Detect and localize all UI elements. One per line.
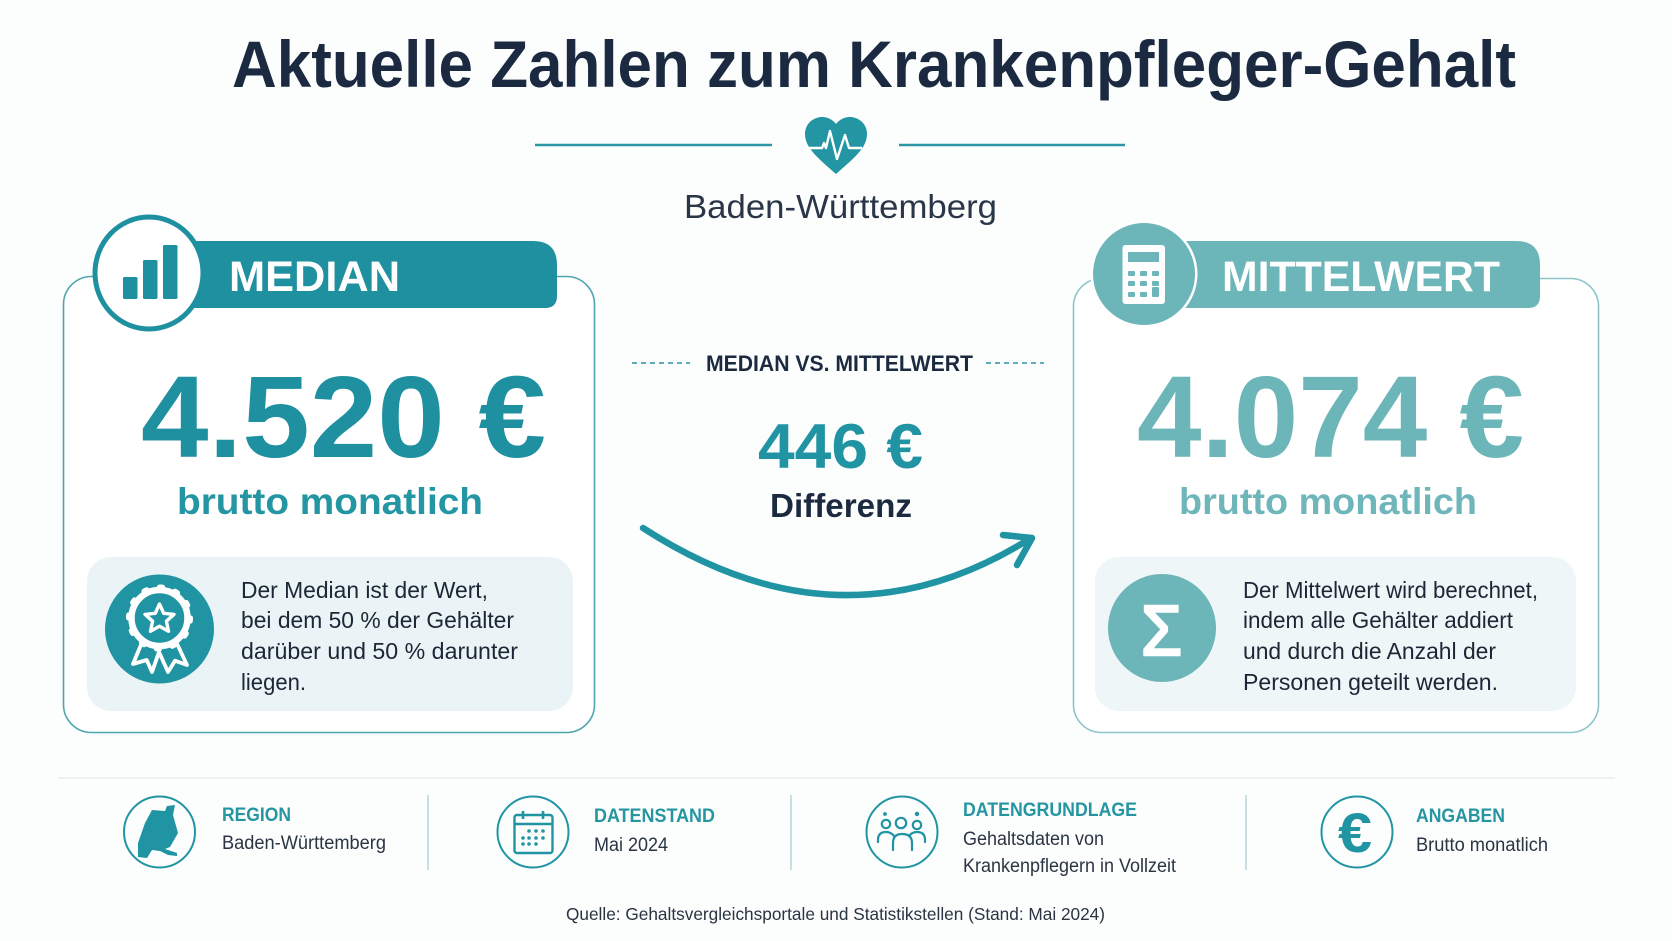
icon: euro: €: [1338, 801, 1372, 864]
difference label: Differenz: [770, 487, 912, 524]
footer item: datengrundlage: [866, 796, 1177, 877]
icon: bar chart: [95, 217, 203, 329]
icon: people: [866, 796, 938, 868]
panel: comparison: [632, 351, 1044, 595]
mittelwert explanation box: [1095, 557, 1576, 711]
icon: euro: [1322, 796, 1392, 868]
icon: sigma: Σ: [1141, 592, 1182, 671]
footer item: datenstand: [498, 796, 715, 868]
subtitle: Baden-Württemberg: [684, 188, 997, 225]
datenstand text: [594, 806, 715, 856]
mittelwert explanation text: Der Mittelwert wird berechnet,: [1243, 577, 1538, 603]
source note: Quelle: Gehaltsvergleichsportale und Statistikstellen (Stand: Mai 2024): [566, 904, 1105, 924]
angaben text: ANGABEN: [1416, 806, 1505, 827]
median explanation text: darüber und 50 % darunter: [241, 638, 518, 664]
datenstand text: Mai 2024: [594, 835, 668, 856]
datengrundlage text: DATENGRUNDLAGE: [963, 800, 1137, 821]
datenstand text: DATENSTAND: [594, 806, 715, 827]
icon: calendar: [498, 796, 568, 868]
mittelwert explanation text: Personen geteilt werden.: [1243, 669, 1498, 695]
angaben text: Brutto monatlich: [1416, 835, 1548, 856]
median banner: [170, 241, 557, 308]
icon: award rosette: [105, 574, 214, 684]
footer item: angaben: [1322, 796, 1548, 868]
median explanation text: [241, 577, 518, 695]
footer item: region: [124, 796, 386, 868]
median unit: brutto monatlich: [177, 481, 483, 522]
mittelwert heading: MITTELWERT: [1222, 253, 1500, 301]
title: Aktuelle Zahlen zum Krankenpfleger-Gehalt: [232, 27, 1516, 101]
panel: median: [64, 217, 594, 732]
median heading: MEDIAN: [229, 253, 400, 301]
region text: REGION: [222, 805, 291, 826]
panel: mittelwert: [1074, 220, 1598, 732]
mittelwert value: 4.074 €: [1137, 352, 1524, 482]
mittelwert banner: [1170, 241, 1540, 308]
icon: sigma: [1108, 574, 1216, 682]
arrow: [643, 528, 1032, 595]
mittelwert unit: brutto monatlich: [1179, 481, 1477, 522]
region text: [222, 805, 386, 854]
median explanation text: liegen.: [241, 669, 306, 695]
datengrundlage text: Gehaltsdaten von: [963, 829, 1104, 850]
median value: 4.520 €: [141, 352, 546, 482]
median explanation box: [87, 557, 573, 711]
median explanation text: bei dem 50 % der Gehälter: [241, 607, 514, 633]
mittelwert explanation text: [1243, 577, 1538, 695]
angaben text: [1416, 806, 1548, 856]
median explanation text: Der Median ist der Wert,: [241, 577, 488, 603]
datengrundlage text: Krankenpflegern in Vollzeit: [963, 856, 1177, 877]
difference value: 446 €: [758, 412, 923, 482]
mittelwert explanation text: indem alle Gehälter addiert: [1243, 607, 1514, 633]
icon: calculator: [1090, 220, 1198, 328]
icon: region map: [124, 796, 195, 868]
datengrundlage text: [963, 800, 1177, 877]
mittelwert explanation text: und durch die Anzahl der: [1243, 638, 1496, 664]
heart divider: [535, 117, 1125, 174]
comparison heading: MEDIAN VS. MITTELWERT: [706, 351, 974, 376]
region text: Baden-Württemberg: [222, 833, 386, 854]
